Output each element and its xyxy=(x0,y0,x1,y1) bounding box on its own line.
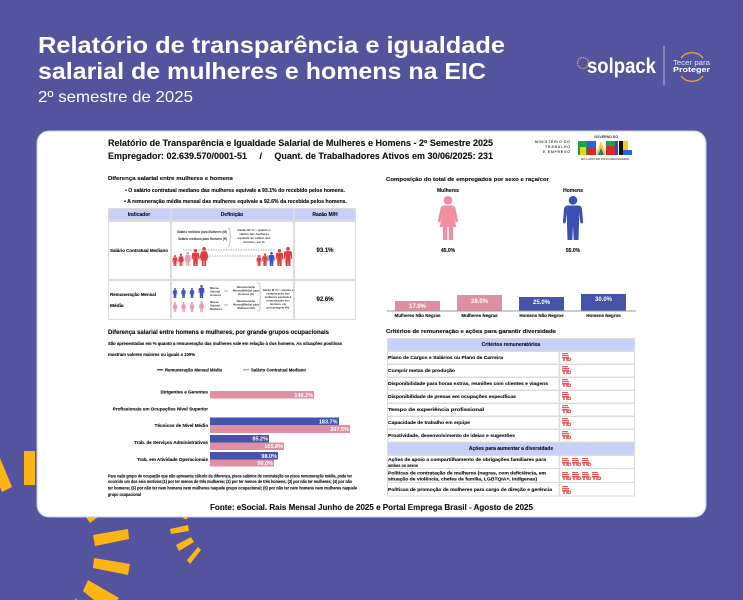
table: pay ratio: 93.1% xyxy=(316,248,334,254)
icon: man 55%: Homens xyxy=(563,188,583,194)
diagram: mean pay definition: Mensal(Média) para xyxy=(233,288,259,292)
diagram: mean pay definition: Remuneração xyxy=(237,285,256,289)
bar chart: sex and race: Mulheres Não Negras xyxy=(394,313,441,318)
table: pay ratio: Remuneração Mensal xyxy=(110,292,156,298)
diagram: mean pay definition: Homens xyxy=(210,293,221,297)
table: criteria and actions xyxy=(388,338,634,496)
legend: Remuneração Mensal Média xyxy=(165,368,222,372)
logo: ministry and Governo do Brasil: DO LADO DO POVO BRASILEIRO xyxy=(581,157,630,161)
diagram: mean pay definition: Mulheres (M) xyxy=(237,306,255,310)
table: pay ratio xyxy=(108,208,356,320)
diagram: mean pay definition: Massa xyxy=(210,300,219,304)
icon: man 55% xyxy=(563,188,583,254)
footnote xyxy=(108,474,358,497)
report heading xyxy=(108,138,493,161)
footnote: Para cada grupo de ocupação que não apresenta cálculo da diferença, pisos salários de contratação ou pisos remuneração média, pode ter xyxy=(108,474,352,478)
table: pay ratio: 92.6% xyxy=(316,297,334,303)
section: workforce composition xyxy=(386,177,583,254)
table: criteria and actions: Disponibilidade de presas em ocupações específicas xyxy=(388,394,516,400)
logo: solpack and Tecer para Proteger: Proteger xyxy=(673,65,710,74)
subtitle: 2º semestre de 2025 xyxy=(38,89,193,106)
bar chart: occupational groups: 98.0% xyxy=(261,454,277,460)
legend xyxy=(157,368,306,372)
logo: ministry and Governo do Brasil: TRABALHO xyxy=(545,145,570,149)
bar chart: occupational groups: 183.7% xyxy=(319,420,338,426)
bar chart: sex and race: Homens Negros xyxy=(586,313,621,318)
table: criteria and actions: Políticas de promoção de mulheres para cargo de direção e gerência xyxy=(388,487,552,493)
explanatory text: mostram valores maiores ou iguais a 100% xyxy=(108,352,195,357)
bar chart: sex and race: 25.0% xyxy=(533,300,551,306)
table: criteria and actions: Tempo de experiência profissional xyxy=(388,407,484,413)
source line: Fonte: eSocial. Rais Mensal Junho de 2025 e Portal Emprega Brasil - Agosto de 2025 xyxy=(210,503,534,512)
section: pay difference xyxy=(108,176,348,205)
diagram: median salary definition: Salário mediano para Mulheres (M) xyxy=(177,230,227,234)
heading: pay difference: Diferença salarial entre mulheres e homens xyxy=(108,176,233,182)
report heading: Relatório de Transparência e Igualdade Salarial de Mulheres e Homens - 2º Semestre 2025 xyxy=(108,138,493,148)
table: criteria and actions: Critérios remuneratórios xyxy=(482,342,541,348)
bar chart: sex and race: Mulheres Negras xyxy=(461,313,498,318)
bar chart: sex and race: Homens Não Negros xyxy=(519,313,564,318)
table: criteria and actions: Cumprir metas de produção xyxy=(388,368,455,374)
logo: ministry and Governo do Brasil: MINISTÉRIO DO xyxy=(535,139,570,144)
diagram: median salary definition: equivale ao salário dos xyxy=(237,236,271,240)
diagram: mean pay definition: Mensal(Média) para xyxy=(233,302,259,306)
section: occupational groups xyxy=(108,330,358,497)
footnote: ocorrido um dos seis motivos:(1) por ter menos de três mulheres; (2) por ter menos de três homens; (3) por não ter mulheres; (4) por não xyxy=(108,479,352,484)
explanatory text xyxy=(108,341,342,357)
bar chart: sex and race: 17.0% xyxy=(409,304,427,310)
bar chart: occupational groups xyxy=(113,390,350,467)
diagram: median salary definition: Razão M / H = quanto o xyxy=(238,228,271,232)
icon: man 55%: 55.0% xyxy=(566,248,581,254)
table: pay ratio: Razão M/H xyxy=(312,212,338,218)
legend: Salário Contratual Mediano xyxy=(251,368,306,372)
table: criteria and actions: Plano de Cargos e Salários ou Plano de Carreira xyxy=(388,355,503,361)
table: criteria and actions: Ações para aumentar a diversidade xyxy=(469,446,553,452)
diagram: median salary definition: homens, em % xyxy=(243,240,265,244)
diagram: mean pay definition: Salarial xyxy=(210,290,220,294)
table: criteria and actions: Capacidade de trabalho em equipe xyxy=(388,420,470,426)
diagram: median salary definition xyxy=(172,228,292,266)
bar chart: occupational groups: Trab. em Atividade Operacionais xyxy=(137,457,208,462)
icon: woman 45%: Mulheres xyxy=(437,188,459,194)
table: pay ratio: Salário Contratual Mediano xyxy=(110,248,168,254)
diagram: mean pay definition: homens, em xyxy=(270,302,287,306)
footnote: grupo ocupacional xyxy=(108,492,141,497)
bar chart: occupational groups: 148.2% xyxy=(294,393,313,399)
bar chart: occupational groups: Técnicos de Nível Médio xyxy=(155,423,208,428)
diagram: mean pay definition: Mulheres xyxy=(210,307,223,311)
diagram: mean pay definition: Remuneração xyxy=(237,299,256,303)
report heading: Empregador: 02.639.570/0001-51 / Quant. de Trabalhadores Ativos em 30/06/2025: 231 xyxy=(108,151,493,161)
table: criteria and actions: Políticas de contratação de mulheres (negras, com deficiência, em xyxy=(388,470,546,476)
diagram: median salary definition: salário das mulheres xyxy=(239,232,269,236)
diagram: mean pay definition: Razão M / H = quanto a xyxy=(263,288,294,292)
diagram: mean pay definition: porcentagem (%) xyxy=(267,306,289,310)
title xyxy=(38,32,505,106)
table: criteria and actions: ambos os sexos xyxy=(388,463,418,469)
title: salarial de mulheres e homens na EIC xyxy=(38,58,486,84)
footnote: ter homens; (5) por não ter nem homens nem mulheres naquele grupo ocupacional; (6) por não ter nem homens nem mulheres naquele xyxy=(108,486,358,490)
bar chart: occupational groups: 85.2% xyxy=(252,436,268,442)
bullet text: • A remuneração média mensal das mulheres equivale a 92.6% da recebida pelos homens. xyxy=(124,199,348,205)
table: pay ratio: Média xyxy=(110,303,124,309)
bar chart: sex and race xyxy=(387,294,636,318)
bar chart: occupational groups: Trab. de Serviços Administrativos xyxy=(134,440,208,445)
icon: woman 45% xyxy=(437,188,459,254)
bar chart: occupational groups: 90.0% xyxy=(257,461,273,467)
logo: solpack and Tecer para Proteger: solpack xyxy=(587,55,656,78)
heading: criteria: Critérios de remuneração e ações para garantir diversidade xyxy=(386,329,556,335)
heading: occupational groups: Diferença salarial entre homens e mulheres, por grande grupos ocupacionais xyxy=(108,330,330,336)
diagram: mean pay definition: mulheres equivale à xyxy=(265,295,292,299)
decorative sun rays xyxy=(0,451,201,600)
table: pay ratio: Definição xyxy=(221,212,243,218)
bar chart: occupational groups: Profissionais em Ocupações Nível Superior xyxy=(113,406,208,412)
diagram: mean pay definition: Salarial xyxy=(210,304,220,308)
table: criteria and actions: Disponibilidade para horas extras, reuniões com clientes e viagens xyxy=(388,381,548,387)
bullet text xyxy=(124,188,348,205)
icon: woman 45%: 45.0% xyxy=(441,248,456,254)
title: Relatório de transparência e igualdade xyxy=(38,32,505,58)
logo: solpack and Tecer para Proteger xyxy=(578,46,710,85)
bar chart: sex and race: 28.0% xyxy=(471,299,489,305)
bar chart: sex and race: 30.0% xyxy=(595,297,613,303)
logo: ministry and Governo do Brasil: GOVERNO DO xyxy=(594,135,618,139)
diagram: mean pay definition: remuneração das xyxy=(266,292,290,296)
table: criteria and actions: Proatividade, desenvolvimento de ideias e sugestões xyxy=(388,433,515,439)
logo: solpack and Tecer para Proteger: Tecer para xyxy=(673,60,710,67)
logo: ministry and Governo do Brasil: E EMPREGO xyxy=(543,150,570,154)
diagram: mean pay definition: Homens (H) xyxy=(238,292,254,296)
diagram: mean pay definition: Massa xyxy=(210,286,219,290)
heading: composition: Composição do total de empregados por sexo e raça/cor xyxy=(386,177,550,183)
explanatory text: São apresentadas em % quanto a remuneração das mulheres vale em relação à dos homens. As situações positivas xyxy=(108,341,342,346)
bullet text: • O salário contratual mediano das mulheres equivale a 93.1% do recebido pelos homens. xyxy=(125,188,346,194)
bar chart: occupational groups: 207.5% xyxy=(330,427,349,433)
diagram: mean pay definition xyxy=(173,283,294,312)
diagram: median salary definition: Salário mediano para Homens (H) xyxy=(178,237,227,241)
bar chart: occupational groups: Dirigentes e Gerentes xyxy=(160,390,208,394)
panel: report card xyxy=(37,131,706,517)
icons: criteria markers xyxy=(562,353,601,494)
bar chart: occupational groups: 105.8% xyxy=(264,444,283,450)
table: criteria and actions: Ações de apoio a compartilhamento de obrigações familiares para xyxy=(388,457,546,463)
logo: ministry and Governo do Brasil xyxy=(535,135,632,161)
diagram: mean pay definition: remuneração dos xyxy=(266,298,290,302)
table: pay ratio: Indicador xyxy=(128,212,150,218)
table: criteria and actions: situação de violência, chefes de família, LGBTQIA+, indígenas) xyxy=(388,476,537,482)
